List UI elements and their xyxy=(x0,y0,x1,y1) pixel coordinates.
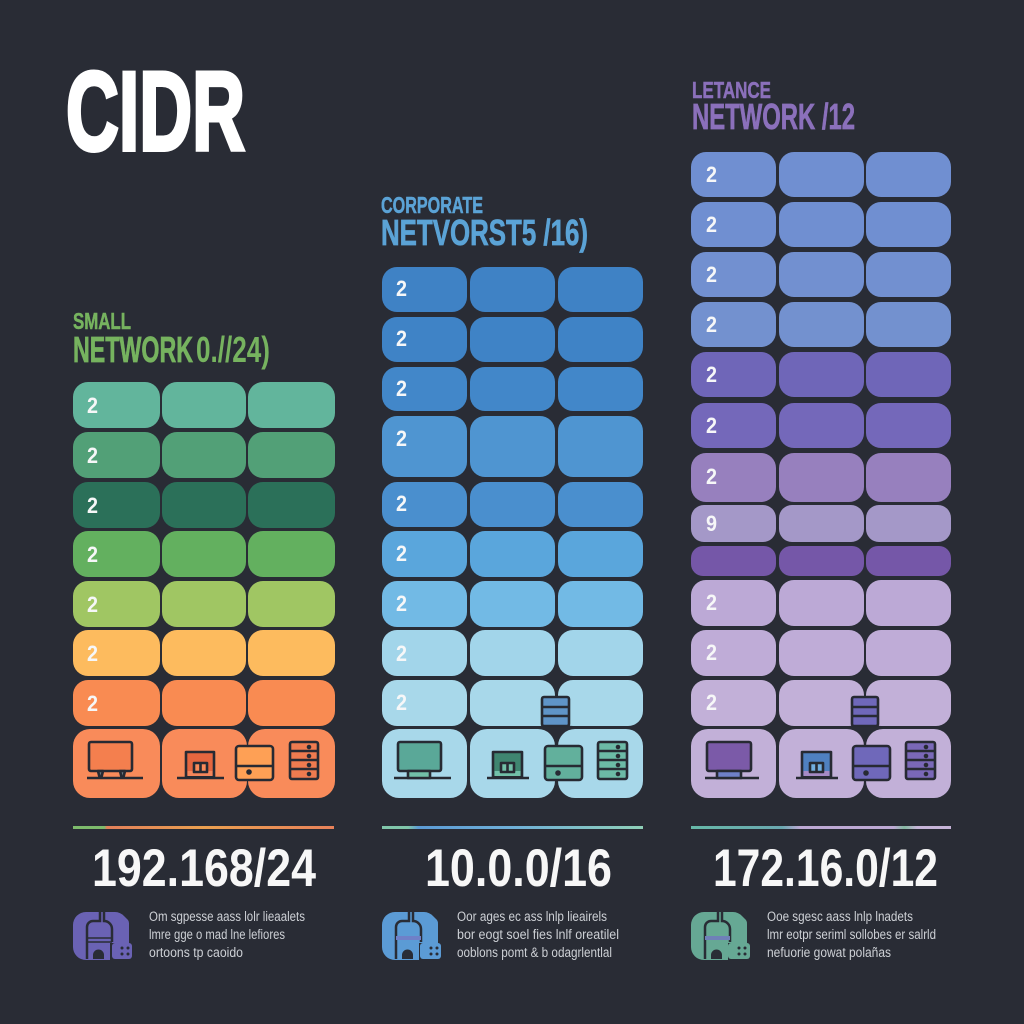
row labels: 2 xyxy=(87,691,98,716)
row labels: 2 xyxy=(706,640,717,665)
description: large: lmr eotpr seriml sollobes er salrld xyxy=(767,927,936,942)
row labels: 2 xyxy=(396,641,407,666)
row labels: 2 xyxy=(396,376,407,401)
description: large: Ooe sgesc aass lnlp lnadets xyxy=(767,909,913,924)
range bar: corporate xyxy=(382,826,643,829)
row labels: 2 xyxy=(396,690,407,715)
row labels xyxy=(396,276,407,715)
panel: small network address block grid xyxy=(73,382,335,798)
CIDR value: large: 172.16.0/12 xyxy=(713,839,938,898)
CIDR value: small: 192.168/24 xyxy=(92,839,316,898)
description: large: nefuorie gowat polañas xyxy=(767,945,891,960)
icons: devices xyxy=(705,697,935,780)
row labels xyxy=(87,393,98,716)
heading: large network: NETWORK /12 xyxy=(692,96,855,137)
icon: network device small xyxy=(73,911,132,960)
row labels: 2 xyxy=(706,312,717,337)
description: small: Om sgpesse aass lolr lieaalets xyxy=(149,909,305,924)
heading: corporate network xyxy=(381,192,588,253)
range bar: small xyxy=(73,826,334,829)
row labels: 2 xyxy=(706,590,717,615)
CIDR value: corporate: 10.0.0/16 xyxy=(425,839,612,898)
row labels: 2 xyxy=(87,493,98,518)
row labels: 2 xyxy=(396,541,407,566)
description: corporate: Oor ages ec ass lnlp lieairels xyxy=(457,909,607,924)
row labels: 2 xyxy=(87,443,98,468)
panel: large network address block grid xyxy=(691,152,951,798)
row labels: 2 xyxy=(706,690,717,715)
row labels: 2 xyxy=(706,413,717,438)
row labels: 2 xyxy=(87,542,98,567)
heading: small network: 0.//24) xyxy=(196,329,270,370)
row labels: 2 xyxy=(706,362,717,387)
row labels: 2 xyxy=(87,393,98,418)
description: small xyxy=(149,909,305,960)
icon: network device corporate xyxy=(382,911,441,960)
row labels: 2 xyxy=(396,326,407,351)
description: corporate: ooblons pomt & b odagrlentlal xyxy=(457,945,612,960)
title: CIDR xyxy=(66,49,245,174)
heading: corporate network: CORPORATE xyxy=(381,192,483,218)
row labels: 2 xyxy=(706,464,717,489)
row labels: 2 xyxy=(396,426,407,451)
heading: small network xyxy=(73,308,270,370)
icon: network device large xyxy=(691,911,750,960)
heading: small network: NETWORK xyxy=(73,329,193,370)
row labels: 2 xyxy=(87,592,98,617)
description: small: lmre gge o mad lne lefiores xyxy=(149,927,285,942)
row labels: 9 xyxy=(706,511,717,536)
description: corporate xyxy=(457,909,619,960)
description: small: ortoons tp caoido xyxy=(149,945,243,960)
row labels: 2 xyxy=(706,262,717,287)
heading: large network xyxy=(692,77,855,137)
row labels: 2 xyxy=(706,162,717,187)
range bar: large xyxy=(691,826,951,829)
heading: small network: SMALL xyxy=(73,308,131,334)
row labels: 2 xyxy=(396,276,407,301)
row labels: 2 xyxy=(706,212,717,237)
panel: corporate network address block grid xyxy=(382,267,643,798)
description: corporate: bor eogt soel fies lnlf oreatilel xyxy=(457,927,619,942)
row labels xyxy=(706,162,717,715)
description: large xyxy=(767,909,936,960)
icons: devices xyxy=(87,742,318,780)
icons: devices xyxy=(394,697,627,780)
heading: corporate network: NETVORST5 /16) xyxy=(381,212,588,253)
row labels: 2 xyxy=(396,491,407,516)
heading: large network: LETANCE xyxy=(692,77,771,103)
row labels: 2 xyxy=(87,641,98,666)
row labels: 2 xyxy=(396,591,407,616)
